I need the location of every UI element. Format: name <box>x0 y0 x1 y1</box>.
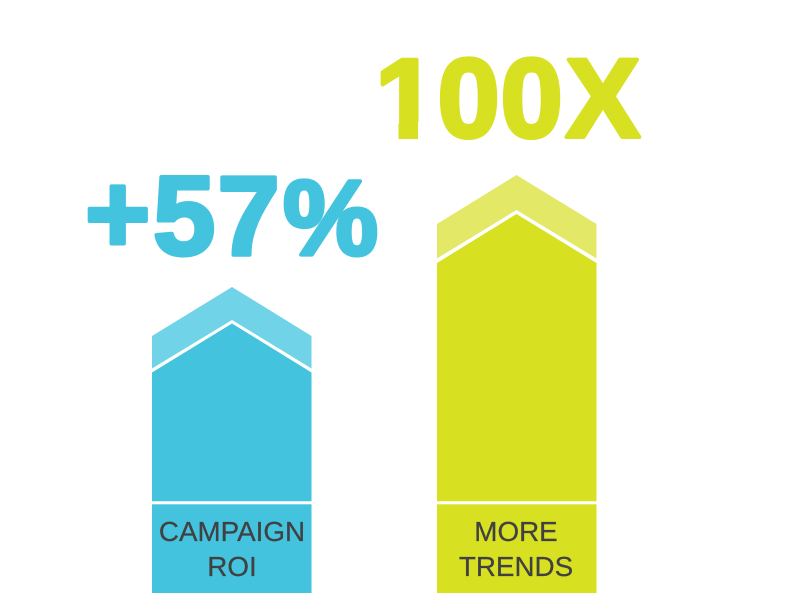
arrow tip: light blue chevron <box>152 287 312 368</box>
stat: +57%: % <box>283 158 378 278</box>
stat: +57%: 7 <box>218 154 280 278</box>
arrow body: yellow <box>437 214 596 501</box>
arrow body: blue <box>152 324 312 501</box>
stat: 100X: X <box>566 36 640 161</box>
stat: 100X: 0 <box>438 36 500 161</box>
stat: +57%: 5 <box>153 154 215 278</box>
stat: 100X: 1 <box>375 36 437 161</box>
label panel: blue <box>152 504 312 593</box>
arrow tip: light yellow chevron <box>437 175 596 258</box>
stat: 100X: 0 <box>500 36 563 161</box>
stat: +57%: + <box>85 152 150 276</box>
label: MORE TRENDS: MORE <box>474 516 558 547</box>
label panel: yellow <box>437 504 596 593</box>
label: MORE TRENDS: TRENDS <box>459 551 573 582</box>
label: CAMPAIGN ROI: CAMPAIGN <box>159 516 305 547</box>
arrow bar: more trends <box>437 175 596 593</box>
label: CAMPAIGN ROI: ROI <box>207 551 257 582</box>
arrow bar: campaign ROI <box>152 287 312 593</box>
